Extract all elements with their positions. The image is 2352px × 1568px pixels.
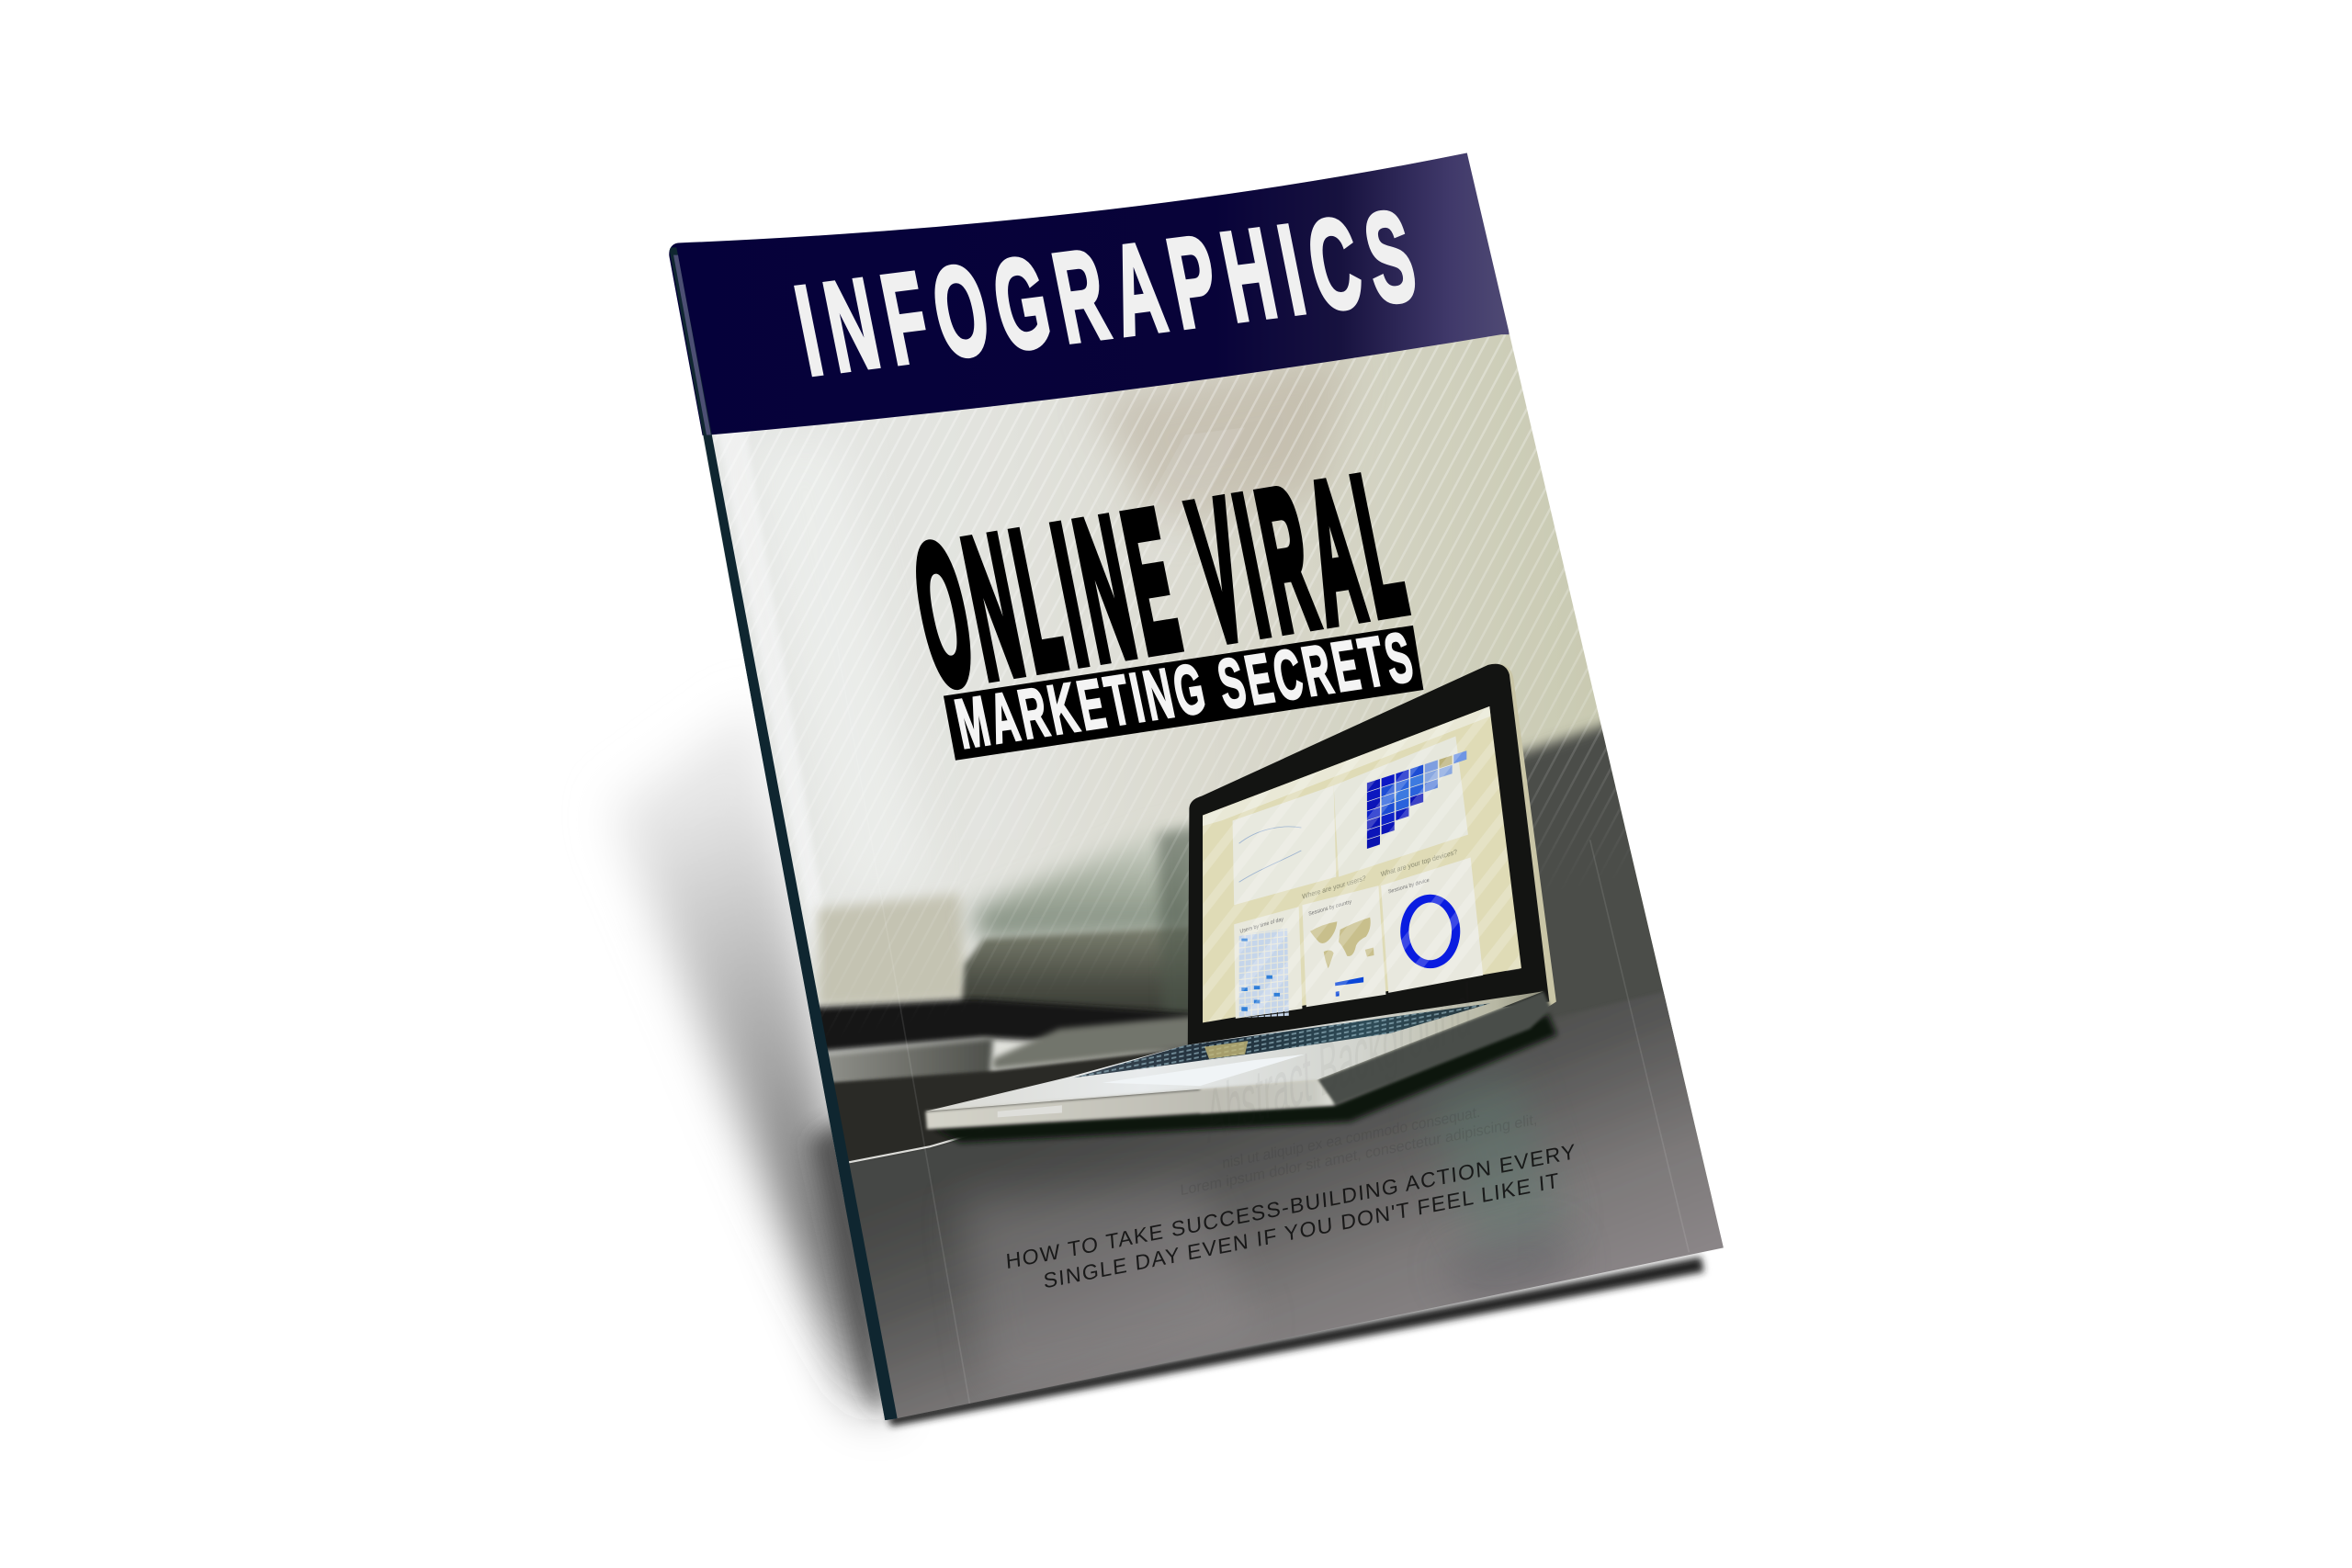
light stripes in the upper photo xyxy=(827,334,1625,961)
lid bezel xyxy=(1188,664,1549,1045)
faint lorem line two: nisl ut aliquip ex ea commodo consequat. xyxy=(1222,1104,1481,1172)
subtitle box: MARKETING SECRETS xyxy=(944,617,1423,763)
panel background xyxy=(1334,737,1468,877)
white band along the spine xyxy=(720,432,821,939)
tagline text xyxy=(1005,1139,1578,1292)
bottom edge shadow xyxy=(888,1257,1704,1427)
panel background xyxy=(1233,785,1336,905)
header band xyxy=(660,135,1509,438)
time panel label: Users by time of day xyxy=(1239,917,1283,935)
black ribbon xyxy=(944,626,1423,761)
laptop base xyxy=(925,991,1551,1129)
keyboard xyxy=(1074,1003,1490,1077)
dark streak on table xyxy=(1457,1236,1569,1300)
browser bar xyxy=(1203,706,1490,826)
faint sub text xyxy=(1180,1104,1538,1199)
dark wall right of laptop xyxy=(1522,718,1682,1071)
dark lower furniture xyxy=(822,1047,1200,1170)
table surface xyxy=(838,992,1724,1420)
heading: INFOGRAPHICS: INFOGRAPHICS xyxy=(786,184,1436,402)
sofa body xyxy=(958,926,1189,1016)
lighter streak on table xyxy=(956,1179,1234,1376)
keyboard tan reflection xyxy=(1204,1041,1248,1059)
users map panel xyxy=(1302,886,1386,1007)
faint facet in the wall xyxy=(960,427,1245,840)
donut chart xyxy=(1400,895,1460,968)
panel background xyxy=(1381,858,1483,993)
trend lines xyxy=(1239,827,1301,882)
screen background xyxy=(1203,706,1521,1022)
cohort heat map xyxy=(1367,750,1466,849)
base top face xyxy=(925,991,1544,1111)
time of day panel xyxy=(1234,907,1302,1019)
subtitle text: MARKETING SECRETS xyxy=(949,617,1422,763)
highlighted table cells xyxy=(1241,939,1280,1011)
beige lower wall xyxy=(818,894,967,1008)
laptop shadow on table xyxy=(933,1014,1557,1143)
time heat table xyxy=(1239,929,1289,1018)
laptop screen xyxy=(1203,706,1521,1022)
front notch xyxy=(998,1105,1062,1117)
spine xyxy=(669,247,899,1425)
book mockup scene xyxy=(612,152,1724,1435)
bar for second country xyxy=(1336,991,1340,997)
spine sheen xyxy=(673,255,711,435)
title: ONLINE VIRAL: ONLINE VIRAL xyxy=(899,432,1425,727)
section label users: Where are your users? xyxy=(1302,874,1366,901)
sofa arm near laptop xyxy=(1151,819,1189,1012)
devices panel xyxy=(1381,858,1483,993)
green tint on table xyxy=(1446,1085,1555,1238)
tagline line one: HOW TO TAKE SUCCESS-BUILDING ACTION EVERY xyxy=(1005,1139,1578,1273)
grey seat cushion left xyxy=(822,1038,993,1084)
tan top right tone xyxy=(1095,353,1350,525)
panel background xyxy=(1302,886,1386,1007)
sofa back cushion xyxy=(974,825,1200,941)
base right side xyxy=(1317,991,1551,1105)
lid silver edge xyxy=(1496,664,1556,1009)
grey seat cushion right xyxy=(993,1015,1200,1069)
fold line left xyxy=(837,645,972,1417)
pale window light xyxy=(842,656,895,862)
book cover xyxy=(669,152,1724,1420)
power cable xyxy=(849,1137,963,1163)
tagline line two: SINGLE DAY EVEN IF YOU DON'T FEEL LIKE IT xyxy=(1043,1168,1562,1292)
laptop lid xyxy=(1188,664,1556,1045)
cast shadow left of the book xyxy=(612,705,882,1417)
bar for top country xyxy=(1335,977,1363,986)
devices panel label: Sessions by device xyxy=(1388,877,1430,896)
faint lorem line one: Lorem ipsum dolor sit amet, consectetur adipiscing elit, xyxy=(1180,1111,1538,1199)
keyboard keycaps xyxy=(1074,1003,1490,1077)
world map xyxy=(1310,918,1374,968)
palm rest highlight xyxy=(1102,1055,1305,1086)
line chart panel xyxy=(1233,785,1336,905)
section label devices: What are your top devices? xyxy=(1380,847,1457,878)
base front edge xyxy=(925,1080,1335,1129)
panel background xyxy=(1234,907,1302,1019)
sofa xyxy=(960,825,1200,1032)
fold line right xyxy=(1590,840,1689,1252)
cover photo background wall xyxy=(660,150,1740,1200)
darker shadow near the spine xyxy=(810,1110,885,1417)
dark band under the wall xyxy=(810,998,1200,1053)
faint abstract background text: Abstract Background xyxy=(1205,968,1473,1159)
cohort panel xyxy=(1334,737,1468,877)
map panel label: Sessions by country xyxy=(1308,899,1351,918)
screen stripes overlay xyxy=(1203,706,1521,1023)
